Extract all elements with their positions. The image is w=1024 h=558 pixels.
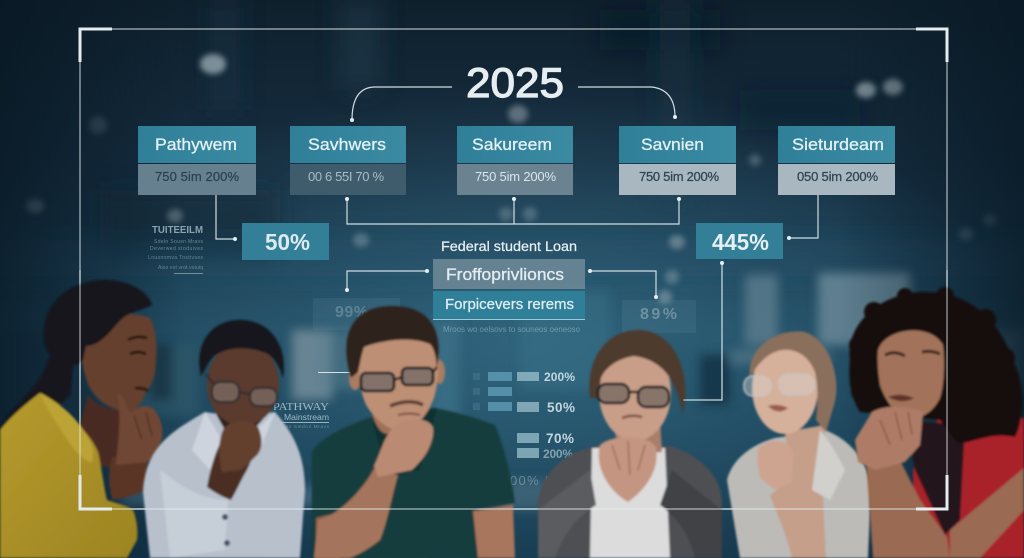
center panel: Forpicevers rerems: Forpicevers rerems bbox=[445, 296, 574, 313]
stat: 445% bbox=[696, 223, 783, 259]
card: Pathywem: 750 5im 200% bbox=[155, 169, 239, 184]
frame overlay line on people bbox=[80, 270, 947, 509]
student 4: gray cardigan bbox=[538, 330, 722, 558]
card: Sieturdeam: 050 5im 200% bbox=[797, 169, 878, 184]
note: Tuition text block: Sdeln Sousn Mravs bbox=[154, 239, 204, 245]
pathway note: PATHWAY bbox=[273, 402, 329, 413]
student 6: curly hair and red top bbox=[849, 287, 1024, 558]
card: Savhwers: Savhwers bbox=[308, 135, 386, 154]
note: Tuition text block bbox=[148, 225, 204, 274]
ghost stat: 99% bbox=[313, 298, 400, 330]
card: Savnien: Savnien bbox=[641, 135, 704, 154]
center panel: Froffoprivlioncs: Froffoprivlioncs bbox=[446, 266, 564, 284]
card: Savnien bbox=[619, 126, 736, 195]
student 3: teal polo bbox=[312, 306, 515, 558]
ghost stat: 99%: 99% bbox=[335, 304, 368, 321]
bar list: 200% bbox=[543, 447, 573, 461]
bar list: 50% bbox=[547, 400, 575, 415]
student 1: yellow shirt bbox=[0, 280, 162, 558]
card: Sakureem: 750 5im 200% bbox=[475, 169, 556, 184]
connector lines bbox=[216, 87, 818, 400]
card: Savhwers: 00 6 55I 70 % bbox=[308, 169, 384, 184]
title: 2025: 2025 bbox=[466, 59, 564, 106]
student 2: light blue shirt and glasses bbox=[143, 320, 305, 558]
note: Tuition text block: Lousnomva Tostivses bbox=[148, 255, 204, 261]
card: Sakureem bbox=[457, 126, 573, 195]
student 5: white shirt and round glasses bbox=[727, 331, 871, 558]
bar list bbox=[473, 370, 585, 488]
note: Tuition text block: Aiso vot vrot voiuiq bbox=[158, 265, 203, 271]
pathway note: Lenn Smdnn Mravs bbox=[279, 424, 330, 429]
pathway note bbox=[273, 372, 356, 429]
note: Tuition text block: Deverwed stoduives bbox=[150, 246, 204, 252]
frame brackets bbox=[80, 29, 947, 509]
heading: Federal student Loan: Federal student Loan bbox=[441, 239, 577, 254]
card: Pathywem bbox=[138, 126, 256, 195]
center panel: Forpicevers rerems bbox=[433, 291, 585, 320]
center panel: Froffoprivlioncs bbox=[433, 259, 585, 289]
stat: 445%: 445% bbox=[712, 229, 769, 255]
stat: 50%: 50% bbox=[265, 229, 310, 255]
card: Pathywem: Pathywem bbox=[155, 135, 237, 154]
caption under center panel: Mroos wo oelsovs to souneos oeneoso bbox=[443, 324, 580, 334]
card: Sakureem: Sakureem bbox=[472, 135, 552, 154]
bar list: 200% bbox=[544, 370, 575, 384]
stat: 50% bbox=[242, 223, 329, 260]
card: Sieturdeam: Sieturdeam bbox=[792, 135, 884, 154]
note: Tuition text block: TUITEEILM bbox=[152, 225, 203, 236]
card: Savhwers bbox=[290, 126, 406, 195]
card: Savnien: 750 5im 200% bbox=[639, 169, 719, 184]
card: Sieturdeam bbox=[778, 126, 895, 195]
ghost stat: 89%: 89% bbox=[640, 306, 677, 323]
ghost stat: 89% bbox=[622, 300, 696, 333]
pathway note: Mainstream bbox=[284, 413, 329, 422]
bar list: 70% bbox=[546, 431, 574, 446]
bar list: 00% HADS bbox=[510, 473, 585, 488]
